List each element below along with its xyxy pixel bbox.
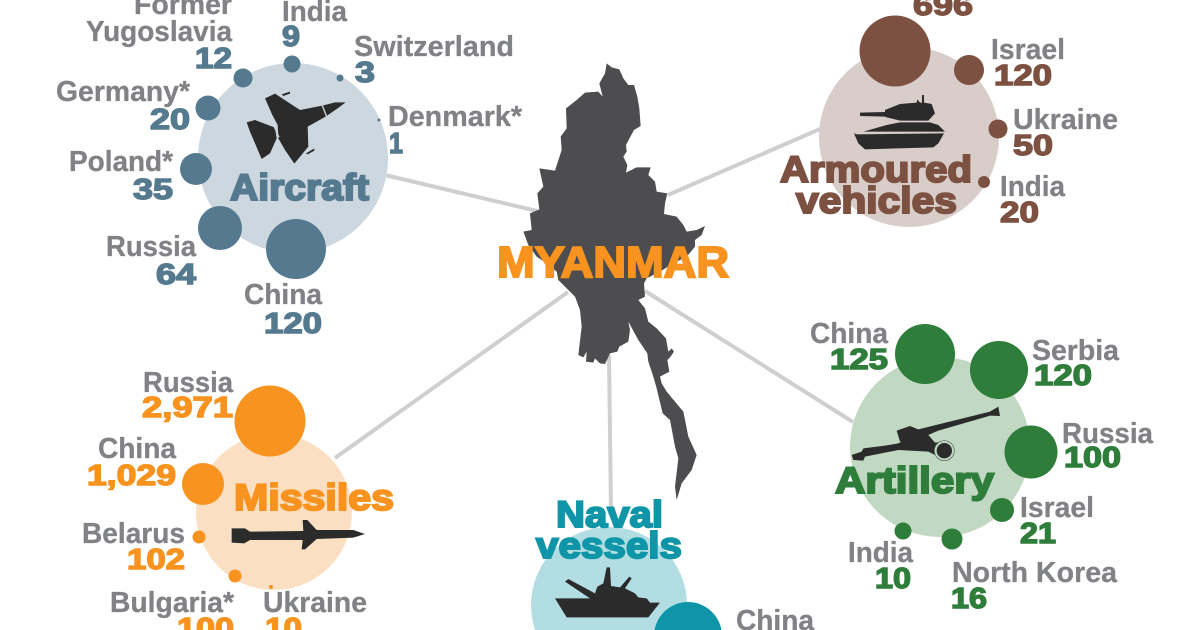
label: Russia 2,971: Russia xyxy=(143,367,234,399)
label: Bulgaria 100: Bulgaria* xyxy=(110,587,235,619)
naval background circle xyxy=(531,527,687,630)
label: Former Yugoslavia 12: 12 xyxy=(195,43,232,75)
label: Ukraine 50 xyxy=(1013,104,1118,162)
label: Russia 64: Russia xyxy=(106,231,197,263)
label: Russia 2,971: 2,971 xyxy=(142,392,233,424)
label: Russia 100: Russia xyxy=(1062,418,1154,450)
label: Switzerland 3: 3 xyxy=(355,57,375,89)
label: Germany 20: 20 xyxy=(150,104,190,136)
label: China 1,029: China xyxy=(98,433,177,465)
label: Denmark 1: Denmark* xyxy=(388,101,523,133)
label: Serbia 120: Serbia xyxy=(1032,335,1120,367)
naval supplier bubble: China xyxy=(654,602,722,630)
aircraft background circle xyxy=(198,63,388,253)
label: Ukraine 10: Ukraine xyxy=(263,587,367,619)
map of Myanmar xyxy=(523,63,705,500)
label: India 10 xyxy=(848,537,914,595)
panel: aircraft xyxy=(56,0,523,340)
label: Israel 120: 120 xyxy=(994,60,1052,92)
label: Denmark 1 xyxy=(388,101,523,160)
missiles background circle xyxy=(196,434,352,590)
label: India 9 xyxy=(282,0,348,53)
icon: missile xyxy=(232,520,365,549)
label: Switzerland 3 xyxy=(354,31,514,89)
label: Russia 64 xyxy=(106,231,197,291)
label: North Korea 16: North Korea xyxy=(952,557,1118,589)
label: India 10: 10 xyxy=(875,563,911,595)
heading: Armoured vehicles xyxy=(780,149,972,221)
label: Russia 64: 64 xyxy=(156,259,196,291)
missiles supplier bubbles xyxy=(182,386,306,589)
label: Belarus 102: Belarus xyxy=(82,518,185,550)
label: Poland 35 xyxy=(69,146,174,206)
label: India 9: 9 xyxy=(282,21,300,53)
label: Switzerland 3: Switzerland xyxy=(354,31,514,63)
label: Israel 21: Israel xyxy=(1020,492,1094,524)
artillery supplier bubbles xyxy=(894,324,1058,550)
connector lines xyxy=(335,129,853,510)
label: Israel 21 xyxy=(1020,492,1094,550)
heading: Armoured vehicles: Armoured xyxy=(780,149,972,190)
panel: artillery xyxy=(810,318,1154,615)
label: China 125: China xyxy=(810,318,889,350)
label: Ukraine 50: 50 xyxy=(1013,130,1053,162)
heading: Naval vessels xyxy=(536,494,682,566)
label: China 1,029: 1,029 xyxy=(87,460,176,492)
label: China 120 xyxy=(244,279,323,340)
heading: Artillery: Artillery xyxy=(835,460,994,501)
icon: tank xyxy=(854,95,945,149)
heading: Aircraft: Aircraft xyxy=(230,167,369,208)
label: Russia 100 xyxy=(1062,418,1154,474)
label: Germany 20 xyxy=(56,76,191,136)
artillery background circle xyxy=(850,357,1030,537)
label: China 120: 120 xyxy=(264,308,322,340)
label: Germany 20: Germany* xyxy=(56,76,191,108)
label: North Korea 16 xyxy=(951,557,1118,615)
label: Former Yugoslavia 12: Yugoslavia xyxy=(86,16,233,48)
heading: Armoured vehicles: vehicles xyxy=(796,180,957,221)
label: Denmark 1: 1 xyxy=(389,128,403,160)
label: China 125: 125 xyxy=(830,344,888,376)
label: Israel 21: 21 xyxy=(1020,518,1056,550)
panel: armoured vehicles xyxy=(780,0,1118,229)
label: Belarus 102: 102 xyxy=(127,544,185,576)
heading: Naval vessels: vessels xyxy=(536,525,682,566)
label: Serbia 120 xyxy=(1032,335,1120,392)
label: Israel 120: Israel xyxy=(991,34,1065,66)
label: China 120: China xyxy=(244,279,323,311)
map label: Myanmar: MYANMAR xyxy=(497,238,729,287)
icon: howitzer xyxy=(852,407,1000,461)
heading: Missiles: Missiles xyxy=(234,477,394,518)
label: India 20: India xyxy=(1000,171,1066,203)
label: India 10: India xyxy=(848,537,914,569)
label: China 1,029 xyxy=(87,433,177,492)
icon: warship xyxy=(555,567,660,617)
armoured background circle xyxy=(819,47,999,227)
aircraft supplier bubbles xyxy=(180,56,380,279)
label: India 20 xyxy=(1000,171,1066,229)
label: India 20: 20 xyxy=(1000,197,1039,229)
label: Poland 35: 35 xyxy=(133,174,173,206)
panel: missiles xyxy=(82,367,394,630)
label: Former Yugoslavia 12 xyxy=(86,0,233,75)
label: Israel 120 xyxy=(991,34,1065,92)
label: Russia 100: 100 xyxy=(1064,442,1121,474)
icon: fighter jet xyxy=(247,92,346,164)
label: Russia 2,971 xyxy=(142,367,234,424)
armoured supplier bubbles xyxy=(860,16,1008,188)
heading: Naval vessels: Naval xyxy=(556,494,663,535)
label: Serbia 120: 120 xyxy=(1034,360,1092,392)
label: Belarus 102 xyxy=(82,518,185,576)
label: Poland 35: Poland* xyxy=(69,146,174,178)
label: North Korea 16: 16 xyxy=(951,583,987,615)
label: China 125 xyxy=(810,318,889,376)
label: Ukraine 50: Ukraine xyxy=(1013,104,1118,136)
panel: naval vessels xyxy=(531,494,815,630)
